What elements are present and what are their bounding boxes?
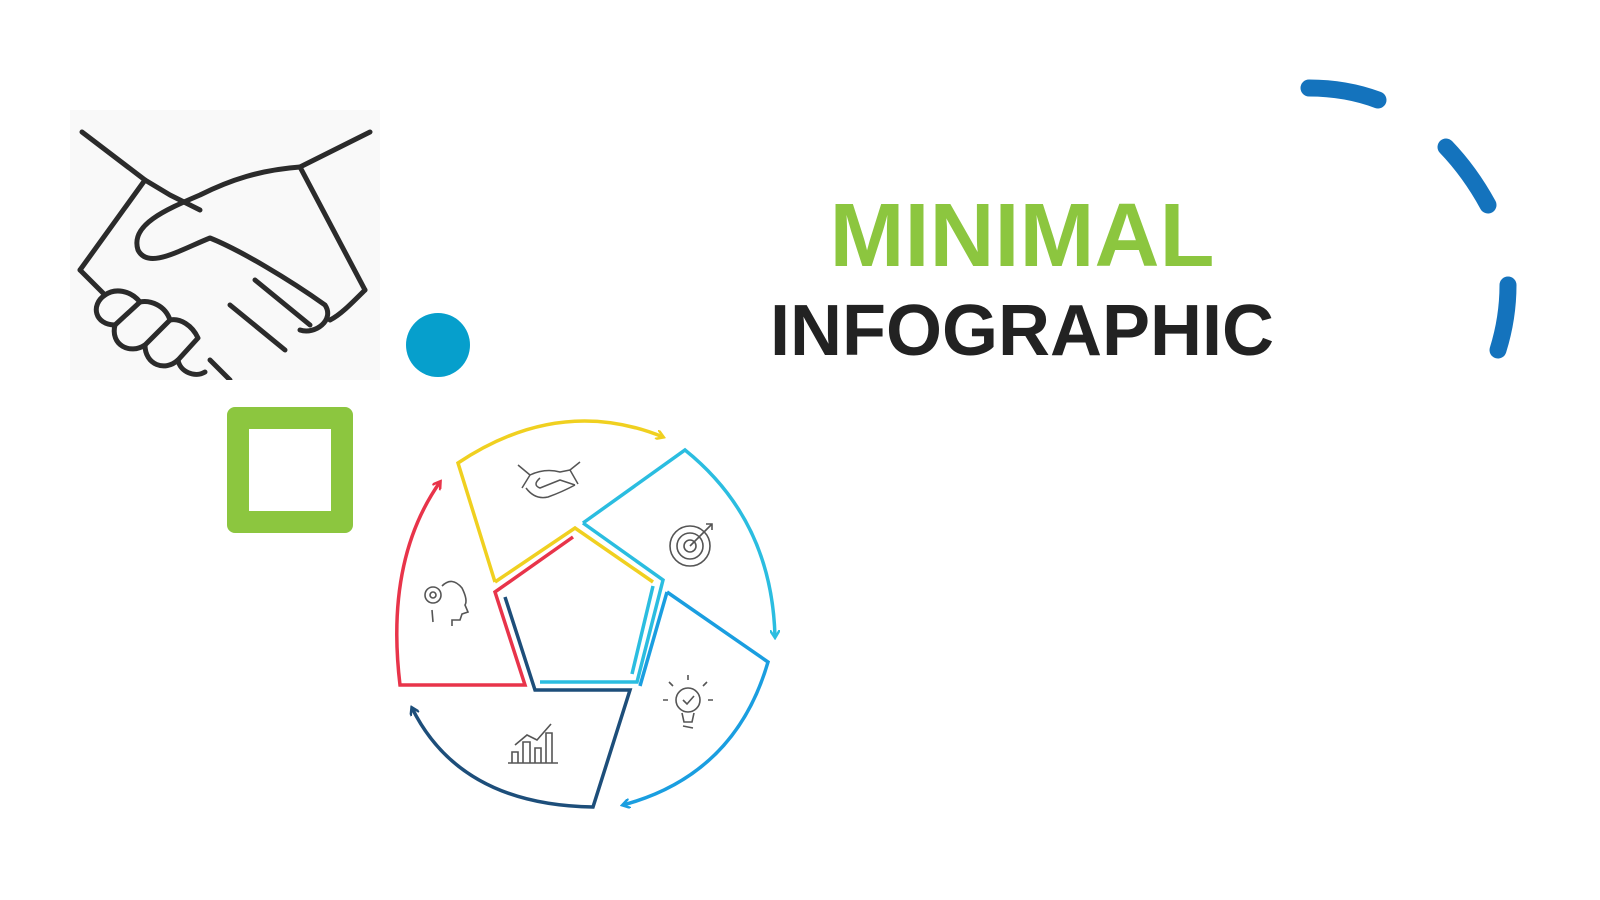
cycle diagram [395,419,780,809]
segment: red (thinking) [397,482,573,685]
segment: blue (idea) [623,592,768,805]
title line: MINIMAL: MINIMAL [830,186,1214,286]
icon: large handshake [78,130,372,380]
decorative blue dashed arc [1300,80,1516,358]
segment: yellow (partnership) [458,421,663,582]
segment: navy (growth) [412,597,630,807]
decorative green square outline [227,407,353,533]
icon: small handshake [518,462,580,498]
segment: cyan (target) [540,450,775,682]
icon: bar chart [508,724,558,763]
icon: target [670,524,712,566]
title [770,186,1274,371]
decorative blue dot [406,313,470,377]
icon: lightbulb [663,675,713,728]
title line: INFOGRAPHIC: INFOGRAPHIC [770,291,1274,371]
icon: head with gear [425,581,468,626]
